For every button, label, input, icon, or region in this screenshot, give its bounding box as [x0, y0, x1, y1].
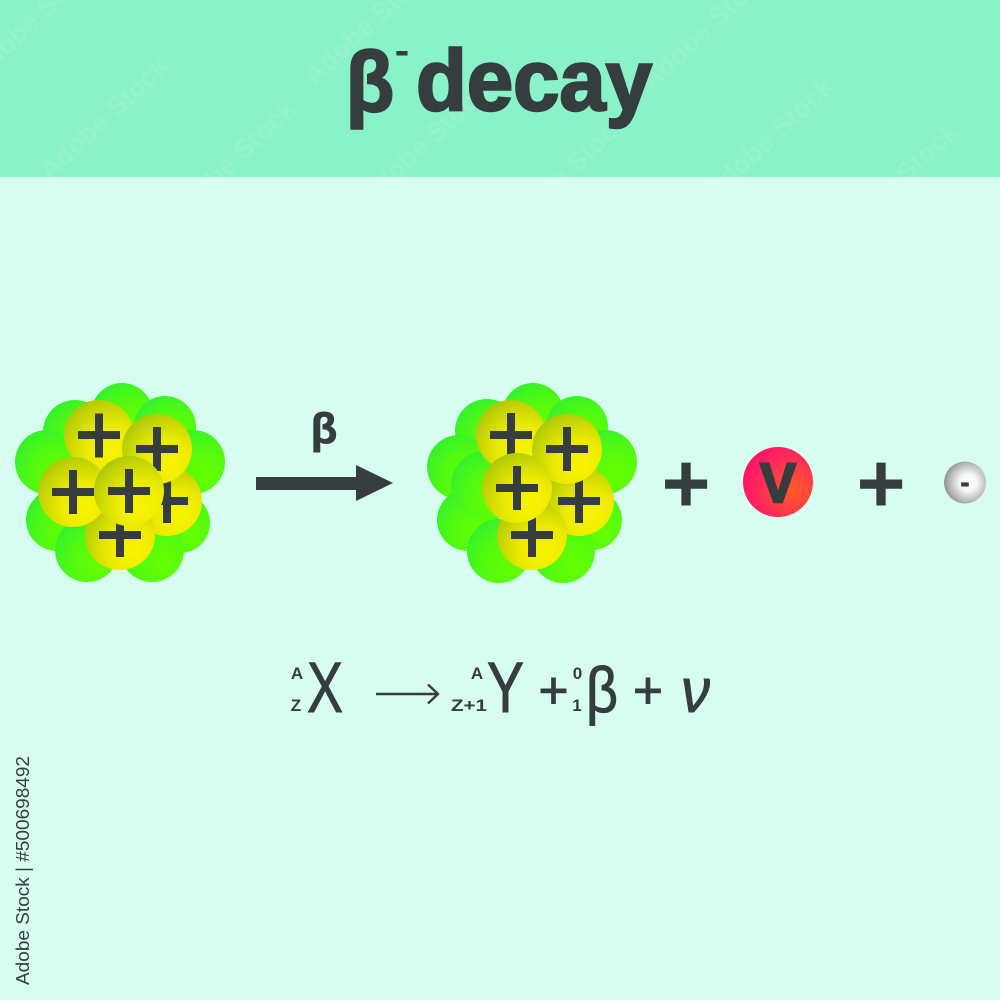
decay equation: Y: [487, 649, 524, 728]
proton: [122, 414, 192, 484]
proton: [64, 400, 134, 470]
proton: [544, 466, 614, 536]
title: -: [396, 35, 408, 68]
proton: [38, 457, 108, 527]
text: Adobe Stock: [715, 738, 857, 873]
text: Adobe Stock: [385, 728, 527, 863]
parent nucleus: [15, 383, 225, 582]
text: Adobe Stock: [698, 71, 840, 206]
decay equation: [291, 649, 710, 728]
decay equation: 0: [573, 664, 582, 683]
title: decay: [416, 33, 652, 129]
text: Adobe Stock: [330, 268, 472, 403]
text: Adobe Stock: [50, 718, 192, 853]
proton: [132, 466, 202, 536]
text: Adobe Stock: [353, 76, 495, 211]
beta label: β: [311, 405, 337, 453]
decay equation: A: [291, 664, 303, 683]
proton: [497, 500, 567, 570]
daughter nucleus: [427, 383, 637, 583]
text: Adobe Stock: [213, 561, 355, 696]
text: Adobe Stock: [343, 598, 485, 733]
text: Adobe Stock: [663, 276, 805, 411]
stock credit: Adobe Stock | #500698492: [13, 756, 33, 985]
plus sign: +: [661, 436, 711, 530]
proton: [482, 453, 552, 523]
proton: [532, 414, 602, 484]
text: Adobe Stock: [160, 94, 302, 229]
electron particle: -: [961, 467, 969, 497]
decay equation: Z: [291, 696, 301, 715]
proton: [476, 400, 546, 470]
electron particle: [944, 462, 986, 504]
text: Adobe Stock: [823, 116, 965, 251]
decay equation: ν: [681, 657, 710, 726]
text: Adobe Stock: [205, 226, 347, 361]
text: Adobe Stock: [180, 758, 322, 893]
text: Adobe Stock: [33, 51, 175, 186]
proton: [94, 456, 164, 526]
decay equation: X: [307, 649, 343, 728]
title: β: [346, 35, 394, 129]
decay equation: +: [538, 662, 568, 720]
text: Adobe Stock: [675, 608, 817, 743]
neutrino particle: [743, 447, 813, 517]
text: Adobe Stock: [515, 768, 657, 903]
decay equation: 1: [572, 696, 582, 715]
decay equation: A: [471, 664, 483, 683]
text: Adobe Stock: [8, 593, 150, 728]
plus sign: +: [856, 436, 906, 530]
text: Adobe Stock: [535, 248, 677, 383]
text: Adobe Stock: [493, 106, 635, 241]
text: Adobe Stock: [845, 778, 987, 913]
text: Adobe Stock: [548, 581, 690, 716]
decay equation: β: [586, 654, 618, 726]
neutrino particle: V: [760, 451, 796, 514]
decay equation: Z+1: [451, 696, 487, 715]
decay equation: +: [633, 662, 663, 720]
equation arrow: [376, 684, 438, 704]
reaction arrow: [256, 465, 393, 501]
text: Adobe Stock: [0, 256, 140, 391]
header band: [0, 0, 1000, 177]
proton: [85, 500, 155, 570]
